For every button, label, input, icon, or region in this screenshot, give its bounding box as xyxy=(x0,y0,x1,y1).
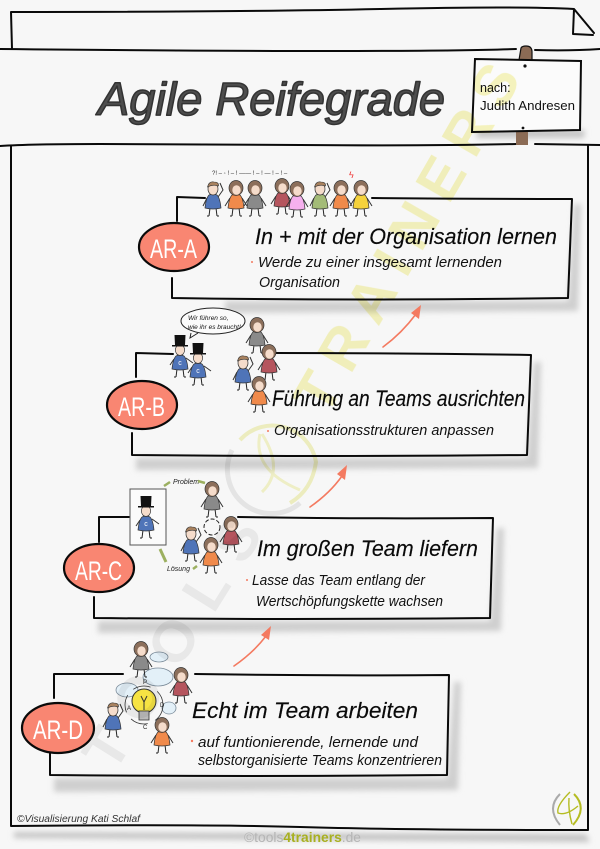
page frame shadow xyxy=(14,832,590,842)
page frame xyxy=(11,146,588,830)
heading: AR-A: In + mit der Organisation lernen xyxy=(255,224,557,249)
badge: AR-B xyxy=(107,381,177,429)
sign: source credit: nach: xyxy=(480,81,511,95)
panel: AR-A xyxy=(139,170,581,313)
badge: AR-C: AR-C xyxy=(75,556,122,586)
sign: source credit: Judith Andresen xyxy=(480,99,575,113)
team around lightbulb with clouds xyxy=(103,642,192,753)
watermark: tools4trainers xyxy=(70,53,533,781)
text: AR-C xyxy=(246,573,443,610)
heading: AR-D: Echt im Team arbeiten xyxy=(192,698,418,723)
arrow: AR-C to AR-B xyxy=(310,465,347,507)
badge: AR-A xyxy=(139,223,209,271)
badge: AR-D xyxy=(22,703,94,753)
people row with exclamations: ?! – ◦ ! – ! —— ! – ! — ! – ! – xyxy=(212,171,288,177)
text: AR-B: Organisationsstrukturen anpassen xyxy=(274,423,494,439)
team around lightbulb with clouds: A xyxy=(127,706,131,712)
people row with exclamations: ϟ xyxy=(349,170,354,180)
team around lightbulb with clouds: C xyxy=(143,725,148,731)
arrow: AR-B to AR-A xyxy=(383,305,421,347)
title: Agile Reifegrade xyxy=(95,73,445,125)
text: AR-A: Werde zu einer insgesamt lernenden xyxy=(258,255,502,271)
problem and solution cycle: Lösung xyxy=(167,566,190,573)
heading: AR-C: Im großen Team liefern xyxy=(257,536,478,561)
problem and solution cycle xyxy=(160,479,242,573)
panel: AR-B xyxy=(107,308,541,470)
text: AR-C: Lasse das Team entlang der xyxy=(252,573,426,589)
badge: AR-A: AR-A xyxy=(150,234,197,264)
text: AR-D: auf funtionierende, lernende und xyxy=(198,735,419,751)
people row with exclamations xyxy=(203,170,372,217)
panel: AR-C xyxy=(64,479,504,633)
footer: tools4trainers.de: ©tools4trainers.de xyxy=(244,829,361,845)
text: AR-C: Wertschöpfungskette wachsen xyxy=(256,594,443,610)
text: AR-A xyxy=(251,255,502,291)
team around lightbulb with clouds: P xyxy=(143,680,147,686)
badge: AR-B: AR-B xyxy=(118,392,165,422)
panel: AR-D xyxy=(22,642,461,792)
leaders and speech bubble xyxy=(170,308,245,385)
text: AR-D xyxy=(191,735,442,769)
watermark: tools4trainers: TOOLS xyxy=(70,506,275,781)
leaders and speech bubble: wie ihr es braucht! xyxy=(188,324,241,331)
team xyxy=(233,318,280,412)
watermark: tools4trainers: TRAINERS xyxy=(281,53,533,424)
team around lightbulb with clouds: D xyxy=(160,703,165,709)
arrow: AR-D to AR-C xyxy=(234,626,271,666)
badge: AR-C xyxy=(64,544,134,592)
problem and solution cycle: Problem xyxy=(173,479,199,486)
badge: AR-D: AR-D xyxy=(33,715,83,745)
header page with folded corner xyxy=(0,8,600,146)
logo: tools4trainers xyxy=(553,792,581,825)
heading: AR-B: Führung an Teams ausrichten xyxy=(272,386,525,411)
sign: source credit xyxy=(472,46,585,145)
credit: visualisation: ©Visualisierung Kati Schlaf xyxy=(17,813,141,825)
leaders and speech bubble: Wir führen so, xyxy=(188,315,229,322)
card: leader xyxy=(130,489,166,545)
text: AR-A: Organisation xyxy=(259,275,340,291)
text: AR-D: selbstorganisierte Teams konzentrieren xyxy=(198,753,442,769)
